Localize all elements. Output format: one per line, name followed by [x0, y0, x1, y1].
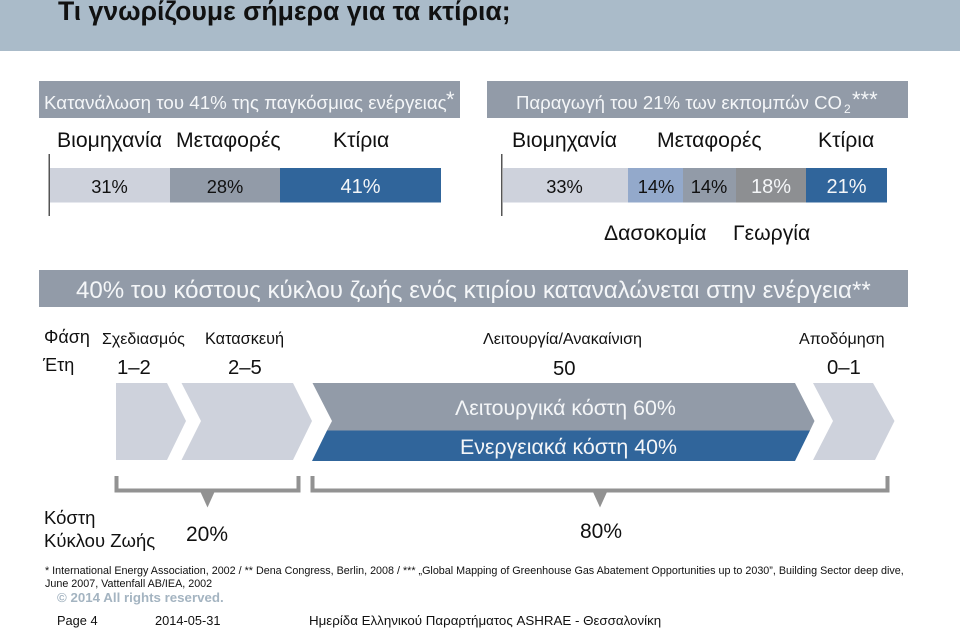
row: phases: Λειτουργία/Ανακαίνιση	[483, 330, 642, 348]
sector labels: energy	[57, 129, 389, 152]
sector labels: energy: Κτίρια	[333, 129, 389, 152]
heading: CO2 emissions: 2	[844, 102, 851, 116]
heading: CO2 emissions	[487, 81, 908, 118]
heading: energy consumption	[39, 81, 460, 118]
heading: energy consumption: Κατανάλωση του 41% της παγκόσμιας ενέργειας	[44, 92, 447, 113]
banner: lifecycle energy cost: 40% του κόστους κύκλου ζωής ενός κτιρίου καταναλώνεται στην ενέργεια**	[76, 277, 871, 304]
chevron: construction	[182, 383, 312, 460]
row: phases: Κατασκευή	[205, 330, 284, 348]
chevron: operation costs: Λειτουργικά κόστη 60%	[455, 396, 676, 420]
row: years	[42, 355, 861, 380]
bracket: 20%	[116, 476, 298, 508]
chevron: demolition	[813, 383, 894, 460]
chevron: operation costs: Ενεργειακά κόστη 40%	[460, 435, 677, 459]
value: 80%: 80%	[580, 520, 622, 543]
footnote: * International Energy Association, 2002 / ** Dena Congress, Berlin, 2008 / *** „Global Mapping of Greenhouse Gas Abatement Opportunities up to 2030”, Building Sector deep dive,	[45, 565, 904, 577]
stacked bar: energy shares: 31%	[91, 176, 128, 197]
row: years: Έτη	[42, 355, 74, 375]
stacked bar: emissions shares: 14%	[691, 176, 727, 197]
panel: energy consumption	[39, 81, 460, 216]
sector labels: energy: Μεταφορές	[176, 129, 281, 152]
sector labels: emissions: Βιομηχανία	[512, 129, 617, 152]
panel: CO2 emissions	[487, 81, 908, 245]
stacked bar: emissions shares: 33%	[546, 176, 583, 197]
label: life cycle cost: Κύκλου Ζωής	[44, 530, 155, 551]
sector labels below bar: Γεωργία	[733, 222, 810, 245]
heading: energy consumption: *	[446, 87, 455, 112]
copyright: © 2014 All rights reserved.	[57, 590, 224, 605]
footer: Page 4	[57, 613, 98, 628]
chevron: design	[116, 383, 186, 460]
label: life cycle cost	[44, 507, 155, 551]
stacked bar: emissions shares: 18%	[751, 176, 791, 198]
row: phases: Αποδόμηση	[799, 330, 885, 348]
stacked bar: emissions shares: 14%	[638, 176, 674, 197]
row: phases: Σχεδιασμός	[102, 331, 185, 348]
chevron: operation costs	[312, 383, 814, 461]
bracket: 80%	[312, 476, 888, 508]
stacked bar: emissions shares	[501, 154, 887, 216]
heading: CO2 emissions: ***	[852, 87, 878, 112]
header band with title	[0, 0, 960, 51]
footnote	[45, 565, 904, 590]
stacked bar: energy shares: 28%	[207, 176, 243, 197]
sector labels: emissions: Κτίρια	[818, 129, 874, 152]
footer	[57, 613, 661, 628]
stacked bar: energy shares: 41%	[340, 176, 381, 198]
row: years: 0–1	[827, 357, 861, 379]
sector labels below bar: Δασοκομία	[604, 222, 707, 245]
stacked bar: emissions shares: 21%	[826, 176, 867, 198]
footnote: June 2007, Vattenfall AB/IEA, 2002	[45, 578, 212, 590]
row: years: 1–2	[117, 357, 151, 379]
sector labels below bar	[604, 222, 810, 245]
stacked bar: energy shares	[48, 154, 441, 216]
label: life cycle cost: Κόστη	[44, 507, 95, 528]
sector labels: energy: Βιομηχανία	[57, 129, 162, 152]
row: years: 2–5	[228, 357, 262, 379]
banner: lifecycle energy cost	[39, 270, 908, 307]
sector labels: emissions: Μεταφορές	[657, 129, 762, 152]
sector labels: emissions	[512, 129, 874, 152]
row: phases	[44, 327, 885, 348]
row: years: 50	[553, 358, 576, 380]
footer: Ημερίδα Ελληνικού Παραρτήματος ASHRAE - Θεσσαλονίκη	[309, 613, 661, 628]
footer: 2014-05-31	[155, 613, 220, 628]
value: 20%: 20%	[186, 523, 228, 546]
heading: CO2 emissions: Παραγωγή του 21% των εκπομπών CO	[516, 92, 842, 113]
row: phases: Φάση	[44, 327, 90, 347]
